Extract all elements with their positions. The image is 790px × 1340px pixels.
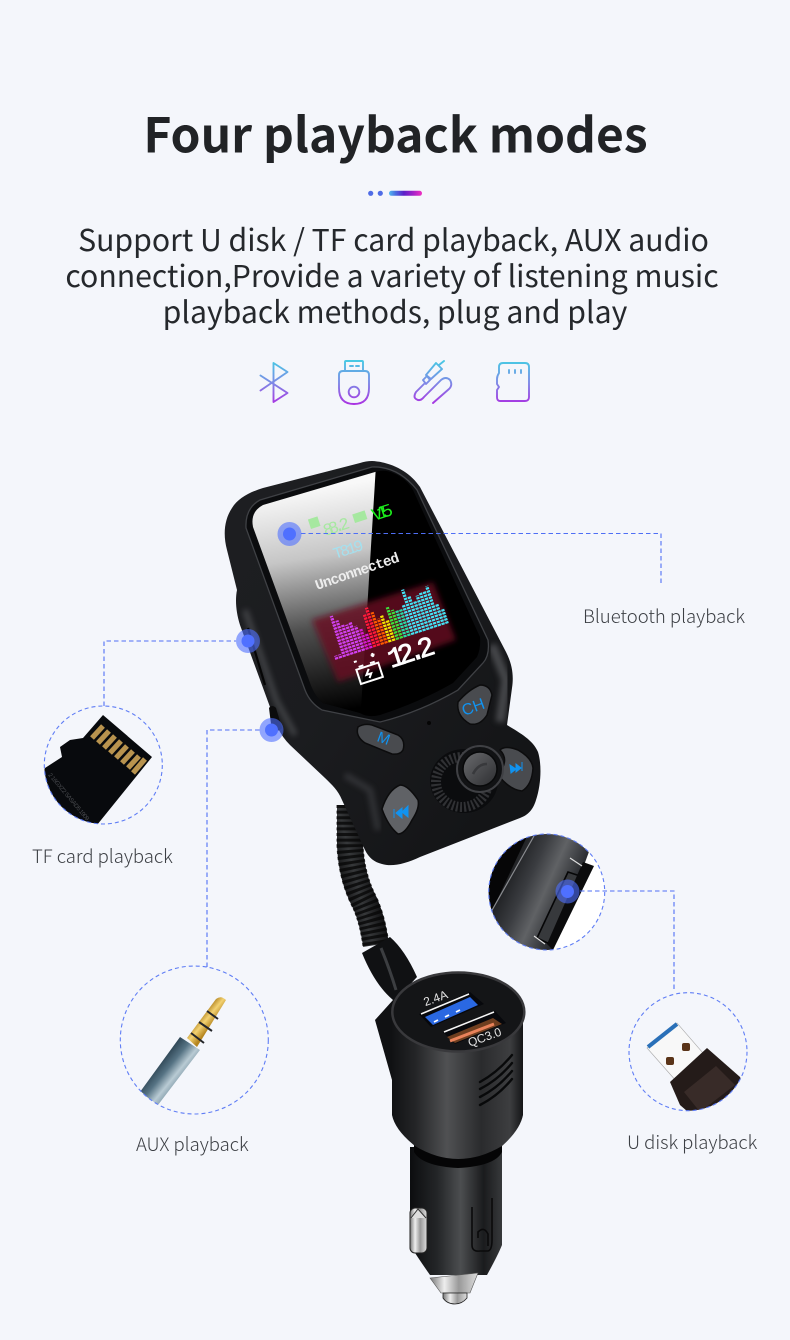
- screen text 88.2: 88.2: [321, 515, 353, 542]
- label: tf card playback: TF card playback: [32, 843, 173, 869]
- label: u disk playback: U disk playback: [627, 1129, 758, 1155]
- tf card print: 2 16GXZ2 SASAD5 1909: [46, 772, 90, 823]
- plug side contact: [410, 1208, 427, 1253]
- u disk holes: [666, 1043, 690, 1065]
- M button: [357, 724, 404, 754]
- side aux jack: [269, 706, 282, 731]
- slot opening: [537, 872, 580, 945]
- left side sheen: [245, 610, 295, 735]
- plug tip: [430, 1273, 478, 1304]
- label: bluetooth playback: Bluetooth playback: [583, 603, 745, 629]
- u disk body: [670, 1048, 740, 1111]
- vents: [480, 1055, 512, 1105]
- side card slot: [248, 628, 265, 685]
- screen: [252, 471, 480, 716]
- inset: tf card: [44, 706, 163, 824]
- icon: aux cable: [414, 361, 451, 403]
- aux cable: [141, 1037, 200, 1104]
- marker: bluetooth: [278, 522, 302, 546]
- icon: tf card: [497, 363, 529, 401]
- tf circle outline: [44, 706, 162, 824]
- marker: tf card: [236, 629, 260, 653]
- spectrum bars: [330, 586, 449, 660]
- aux circle outline: [120, 966, 268, 1114]
- microphone dot: [427, 721, 431, 725]
- title: Four playback modes: [143, 96, 648, 166]
- leader: u disk: [580, 891, 674, 992]
- CH button: CH: [460, 696, 487, 720]
- marker: aux: [260, 718, 284, 742]
- lower panel sheen: [345, 775, 378, 830]
- intro text: connection,Provide a variety of listening music: [65, 252, 719, 296]
- inset: u disk: [629, 993, 748, 1118]
- lower right sheen: [492, 645, 506, 722]
- black edge: [488, 838, 526, 909]
- intro text: Support U disk / TF card playback, AUX audio: [78, 216, 709, 260]
- body shell: [225, 461, 540, 865]
- aux gold jack: [187, 997, 226, 1047]
- screen text T819: T819: [331, 537, 366, 564]
- charger housing: [392, 1012, 523, 1159]
- screen voltage: 12.2: [384, 632, 439, 677]
- volume knob: [430, 746, 503, 813]
- port label QC3.0: QC3.0: [466, 1025, 504, 1050]
- spectrum glow band: [312, 582, 456, 682]
- car charger: [392, 972, 524, 1304]
- orange usb port: [443, 1011, 506, 1044]
- screen icon: card: [308, 516, 321, 529]
- blue usb port: [419, 992, 484, 1027]
- inset: aux plug: [120, 966, 268, 1125]
- plug slot: [472, 1198, 492, 1251]
- plug collar shadow: [414, 1140, 502, 1168]
- u disk circle outline: [629, 993, 747, 1111]
- gooseneck cable: [350, 805, 376, 945]
- slot body: [488, 834, 589, 950]
- leader: bluetooth: [301, 534, 661, 586]
- M button: M: [375, 729, 392, 749]
- icon: bluetooth: [260, 363, 288, 402]
- u disk metal plug: [647, 1023, 703, 1082]
- u disk blue edge: [648, 1024, 677, 1047]
- marker: u disk: [556, 880, 580, 904]
- strain relief: [362, 937, 417, 1080]
- leader: aux: [207, 730, 260, 967]
- title accent divider: [368, 191, 422, 196]
- aux rings: [191, 1011, 218, 1043]
- screen icon: storage: [352, 510, 367, 523]
- transmitter body: [225, 461, 540, 865]
- plug body: [410, 1147, 502, 1275]
- CH button: [458, 685, 492, 724]
- previous button: [382, 785, 418, 834]
- tf card contacts: [92, 726, 145, 773]
- intro text: playback methods, plug and play: [163, 288, 628, 332]
- thin edge line: [491, 836, 534, 912]
- inset: device slot: [488, 834, 606, 950]
- slot circle outline: [489, 834, 605, 950]
- screen text Unconnected: Unconnected: [313, 551, 402, 595]
- bezel highlight: [246, 467, 488, 722]
- housing top face: [392, 972, 524, 1052]
- screen text V15: V15: [370, 501, 396, 527]
- screen glare: [252, 472, 376, 704]
- icon: usb drive: [339, 361, 369, 404]
- next button: [498, 748, 533, 791]
- tf card shape: [44, 715, 152, 824]
- screen battery icon: [353, 652, 383, 684]
- label: aux playback: AUX playback: [136, 1131, 249, 1157]
- leader: tf card: [104, 641, 236, 706]
- port label 2.4A: 2.4A: [422, 987, 450, 1009]
- slot background: [554, 852, 604, 950]
- intro text: [65, 216, 719, 332]
